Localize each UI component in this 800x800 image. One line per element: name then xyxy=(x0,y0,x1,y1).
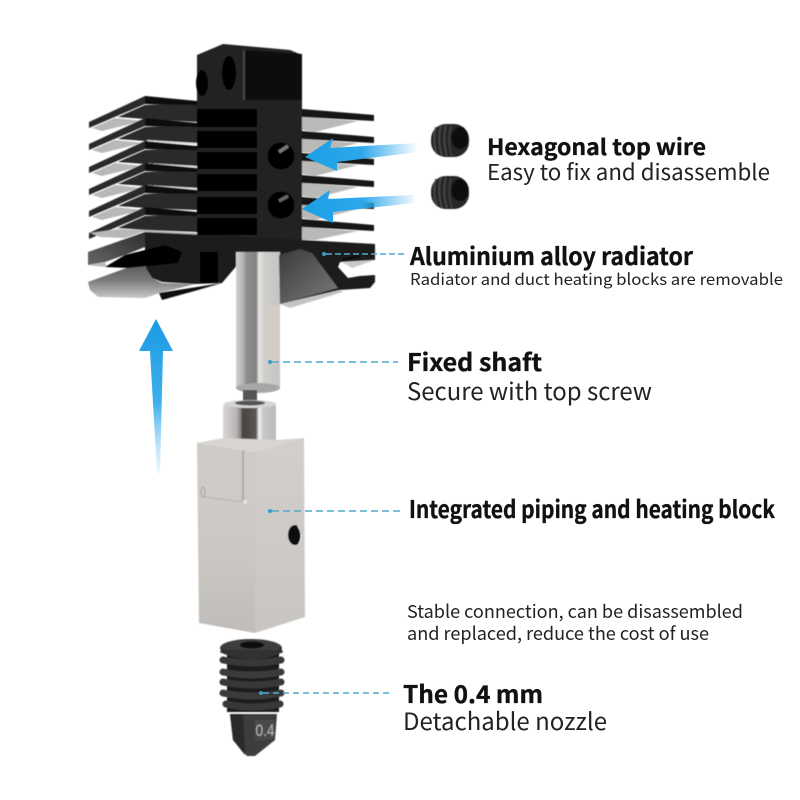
arrow: top screw xyxy=(305,138,418,171)
leader: nozzle xyxy=(259,691,392,695)
text: nozzle: Detachable nozzle xyxy=(403,702,607,737)
arrow: lower screw xyxy=(302,190,414,223)
text: hexagonal top wire: Easy to fix and disassemble xyxy=(487,155,770,187)
text: stable connection xyxy=(407,598,743,646)
fixed shaft xyxy=(236,252,280,404)
text: hexagonal top wire xyxy=(487,130,770,187)
text: stable connection: Stable connection, can be disassembled xyxy=(407,598,743,624)
top mounting block xyxy=(196,44,302,106)
nozzle size mark: 0.4 xyxy=(256,721,274,740)
set screw hole xyxy=(288,525,302,545)
collar xyxy=(223,400,276,448)
right duct shell xyxy=(279,249,343,308)
text: fixed shaft xyxy=(407,343,652,407)
arrow: airflow up xyxy=(139,319,173,473)
radiator heat sink xyxy=(88,44,375,404)
text: stable connection: and replaced, reduce the cost of use xyxy=(407,620,709,646)
text: hexagonal top wire: Hexagonal top wire xyxy=(487,130,706,162)
text: fixed shaft: Fixed shaft xyxy=(407,343,542,378)
central column with slots xyxy=(197,100,302,260)
left fins xyxy=(89,96,197,239)
lower duct left xyxy=(88,232,195,298)
stamped mark xyxy=(201,487,205,497)
icon: set screw 2 xyxy=(431,176,469,209)
text: nozzle xyxy=(403,675,607,737)
icon: set screw 1 xyxy=(431,124,469,157)
leader: radiator xyxy=(322,252,405,256)
text: aluminium alloy radiator: Aluminium alloy radiator xyxy=(409,237,694,272)
text: aluminium alloy radiator: Radiator and duct heating blocks are removable xyxy=(410,266,783,290)
heating block xyxy=(197,400,305,633)
nozzle xyxy=(220,639,282,756)
leader: heating block xyxy=(268,509,400,513)
lower duct body xyxy=(105,232,375,304)
text: fixed shaft: Secure with top screw xyxy=(407,372,652,407)
right fins xyxy=(302,109,374,240)
text: nozzle: The 0.4 mm xyxy=(403,675,543,710)
text: aluminium alloy radiator xyxy=(409,237,783,290)
leader: fixed shaft xyxy=(268,360,398,364)
